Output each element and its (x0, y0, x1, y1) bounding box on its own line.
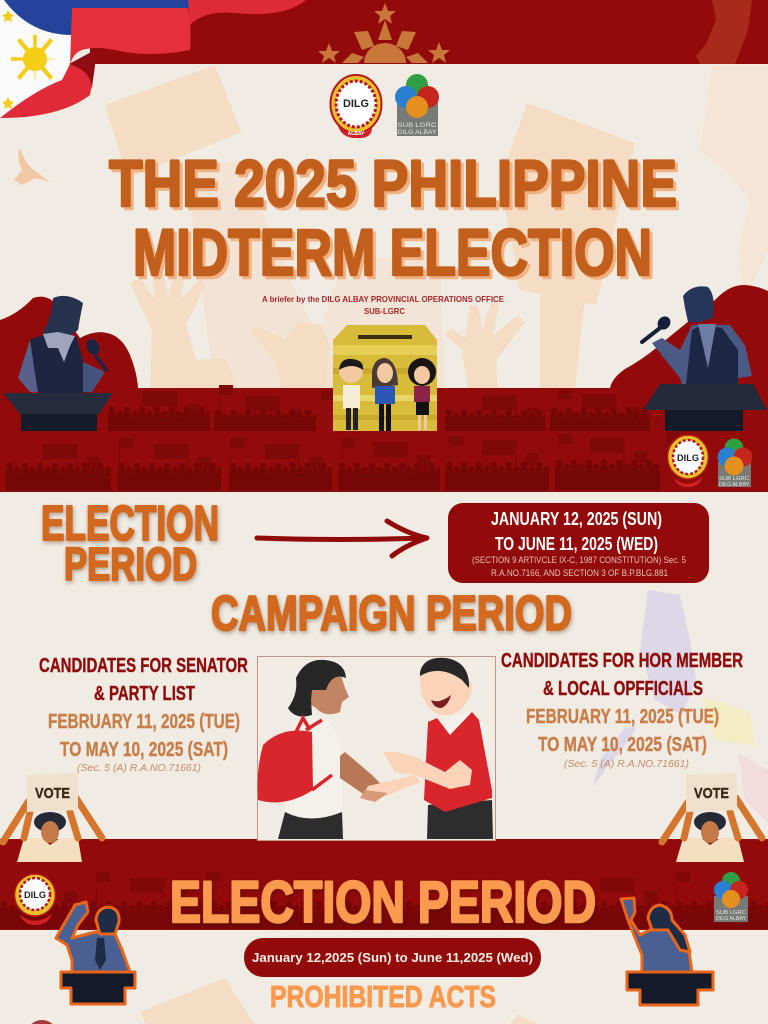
female speaker at podium (3, 296, 113, 431)
election dates box: TO JUNE 11, 2025 (WED) (495, 534, 658, 554)
house and local officials dates: & LOCAL OPFFICIALS (543, 677, 703, 700)
faint map of the Philippines top right (700, 65, 768, 300)
background ballots and raised hands (105, 65, 635, 390)
dove icon (14, 148, 50, 185)
gold ballot box (333, 325, 437, 431)
senator and party list dates: TO MAY 10, 2025 (SAT) (60, 738, 228, 761)
election period heading: PERIOD (64, 538, 197, 590)
senator and party list dates: CANDIDATES FOR SENATOR (39, 654, 248, 677)
middle red band (0, 839, 768, 930)
crowd silhouettes, lower row (6, 432, 680, 491)
handshake illustration (258, 656, 496, 840)
sun and stars emblem (318, 3, 450, 63)
flag sun (11, 35, 59, 84)
election period banner title: ELECTION PERIOD (170, 870, 596, 935)
right orator at podium (621, 898, 713, 1005)
arrow to election dates (257, 521, 427, 556)
top red band (90, 0, 768, 64)
bottom SUB-LGRC logo: DILG ALBAY (716, 916, 747, 922)
SUB-LGRC logo: SUB LGRC (398, 122, 437, 129)
SUB-LGRC logo (395, 74, 439, 136)
person in red vest (360, 658, 493, 839)
briefer subtitle: SUB-LGRC (364, 306, 405, 316)
official with maroon blouse (408, 358, 436, 430)
briefer subtitle: A briefer by the DILG ALBAY PROVINCIAL OPERATIONS OFFICE (262, 294, 504, 304)
bottom SUB-LGRC logo (714, 872, 748, 922)
small SUB-LGRC logo (718, 438, 752, 488)
left orator at podium (56, 902, 135, 1004)
bottom DILG logo: DILG (24, 890, 46, 901)
election period heading (41, 497, 219, 590)
bottom SUB-LGRC logo: SUB LGRC (716, 910, 746, 916)
bottom DILG logo (14, 874, 56, 925)
DILG logo: DILG (343, 98, 369, 110)
small DILG logo (668, 435, 708, 487)
SUB-LGRC logo: DILG ALBAY (398, 129, 437, 136)
official with glasses (339, 359, 363, 430)
prohibited acts heading: PROHIBITED ACTS (270, 979, 496, 1014)
voter with sign, left (3, 773, 102, 862)
crowd silhouettes, stage row (108, 385, 672, 431)
senator and party list dates: (Sec. 5 (A) R.A.NO.71661) (77, 762, 201, 774)
small SUB-LGRC logo: SUB LGRC (719, 476, 749, 482)
DILG logo: ALBAY (348, 131, 365, 137)
senator and party list dates (39, 654, 248, 774)
election dates box (448, 503, 709, 583)
DILG logo (330, 75, 382, 138)
senator and party list dates: FEBRUARY 11, 2025 (TUE) (48, 710, 240, 733)
cropped icon at page bottom (26, 1020, 58, 1024)
three officials cartoon (339, 358, 436, 431)
election dates pill: January 12,2025 (Sun) to June 11,2025 (Wed) (252, 950, 533, 965)
election dates box: (SECTION 9 ARTIVCLE IX-C, 1987 CONSTITUTION) Sec. 5 (472, 555, 686, 565)
voter with sign, right (662, 773, 762, 862)
flag stars (2, 10, 14, 109)
campaign period heading: CAMPAIGN PERIOD (211, 587, 572, 641)
red stage with curved backdrops (0, 285, 768, 492)
election period heading: ELECTION (41, 497, 219, 551)
person with backpack (258, 660, 390, 839)
senator and party list dates: & PARTY LIST (94, 682, 195, 705)
official with blue shirt (372, 358, 398, 431)
election dates pill (244, 938, 541, 977)
house and local officials dates (501, 649, 743, 770)
small DILG logo: DILG (677, 453, 699, 464)
Philippine flag (0, 0, 306, 118)
small SUB-LGRC logo: DILG ALBAY (719, 482, 750, 488)
house and local officials dates: TO MAY 10, 2025 (SAT) (538, 733, 707, 756)
briefer subtitle (262, 294, 504, 316)
election dates box: R.A.NO.7166, AND SECTION 3 OF B.P.BLG.881 (491, 568, 668, 578)
voter with sign, left: VOTE (35, 785, 70, 802)
faint regional map behind campaign section (593, 590, 768, 823)
crowd in lower band (0, 872, 768, 929)
male speaker at podium (642, 286, 767, 431)
house and local officials dates: (Sec. 5 (A) R.A.NO.71661) (564, 758, 689, 770)
election dates box: JANUARY 12, 2025 (SUN) (491, 509, 662, 529)
bottom peach ballots (140, 978, 538, 1024)
title (109, 146, 677, 289)
voter with sign, right: VOTE (694, 785, 729, 802)
